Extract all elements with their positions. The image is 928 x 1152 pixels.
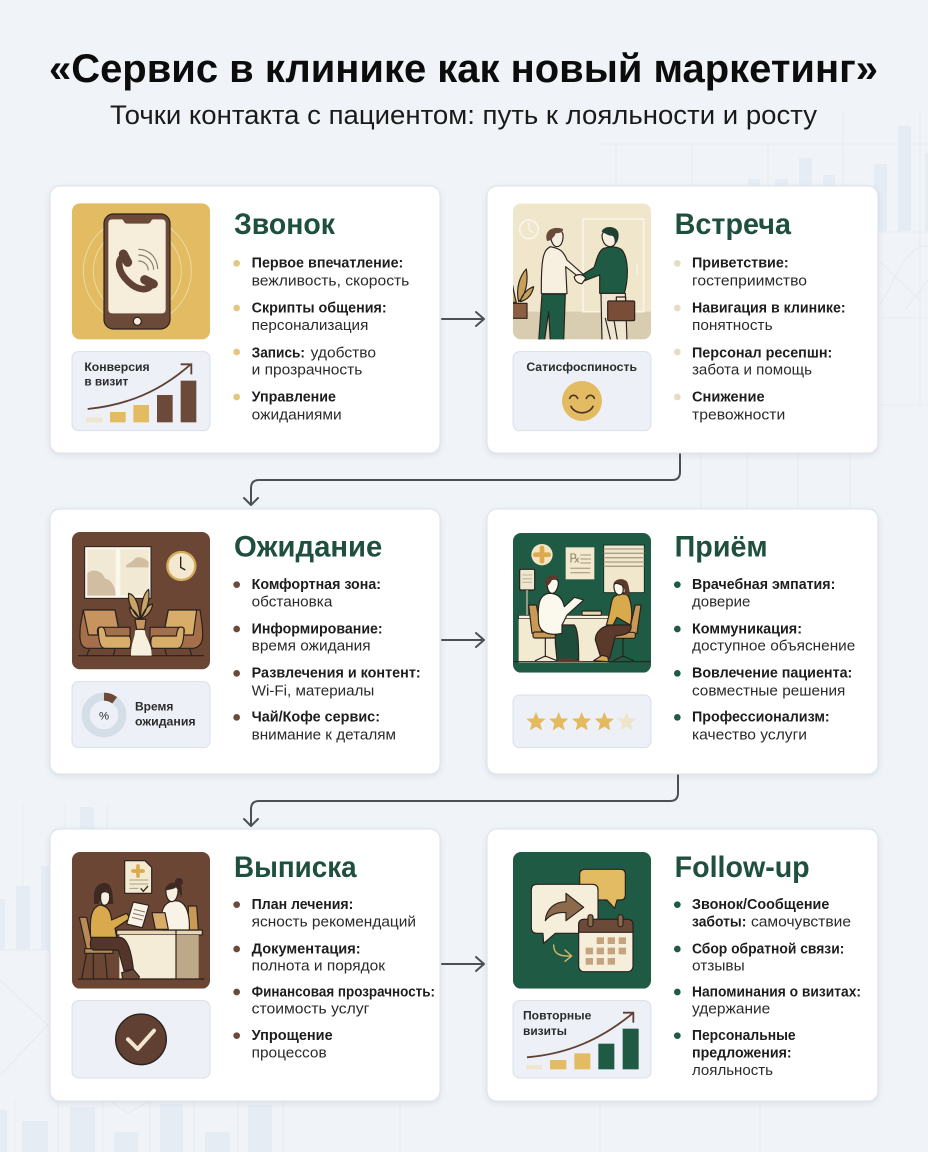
list: ожиданиями: [252, 407, 342, 423]
list: Управление: [252, 390, 336, 406]
list: Коммуникация:: [692, 621, 802, 637]
list: Врачебная эмпатия:: [692, 577, 835, 593]
list: [674, 256, 846, 423]
list: время ожидания: [252, 639, 371, 655]
chart: conversion to visit: в визит: [84, 375, 129, 388]
list: [233, 256, 410, 423]
panel: Follow-up: [487, 829, 878, 1101]
chart: repeat visits: Повторные: [523, 1009, 592, 1022]
chart: repeat visits: [513, 1001, 651, 1078]
list: Профессионализм:: [692, 710, 830, 726]
heading: Выписка: [234, 851, 357, 884]
list: Wi-Fi, материалы: [252, 683, 374, 699]
list: [674, 577, 855, 743]
list: тревожности: [692, 407, 785, 423]
arrow: discharge to follow-up: [442, 957, 484, 971]
illustration: discharge desk: [72, 852, 210, 989]
list: внимание к деталям: [252, 727, 396, 743]
list: Напоминания о визитах:: [692, 984, 861, 1000]
list: вежливость, скорость: [252, 274, 410, 290]
list: Звонок/Сообщение: [692, 897, 829, 913]
panel: Выписка: [50, 829, 440, 1101]
chart: conversion to visit: [72, 352, 210, 431]
list: [233, 577, 421, 743]
subtitle: Точки контакта с пациентом: путь к лояльности и росту: [110, 100, 818, 130]
heading: Приём: [675, 531, 768, 564]
widget: satisfaction smiley: Сатисфоспиность: [526, 361, 637, 374]
list: стоимость услуг: [252, 1002, 369, 1018]
list: отзывы: [692, 959, 745, 975]
widget: satisfaction smiley: [513, 352, 651, 431]
arrow: appointment to discharge: [244, 774, 678, 826]
list: доверие: [692, 594, 750, 610]
title: «Сервис в клинике как новый маркетинг»: [49, 47, 878, 91]
list: Персональные: [692, 1028, 796, 1044]
widget: check mark: [72, 1001, 210, 1078]
panel: Ожидание: [50, 509, 440, 774]
heading: Follow-up: [675, 851, 810, 884]
illustration: handshake: [510, 203, 651, 342]
panel: Звонок: [50, 186, 440, 453]
list: Навигация в клинике:: [692, 300, 846, 316]
heading: Ожидание: [234, 531, 382, 564]
widget: waiting time donut: [72, 682, 210, 748]
heading: Звонок: [234, 208, 335, 241]
widget: star rating: [513, 695, 651, 748]
widget: waiting time donut: %: [99, 710, 109, 722]
list: Запись:: [252, 345, 305, 361]
list: лояльность: [692, 1063, 773, 1079]
list: предложения:: [692, 1046, 792, 1062]
list: и прозрачность: [252, 363, 363, 379]
list: забота и помощь: [692, 363, 812, 379]
panel: Приём: [487, 509, 878, 774]
list: обстановка: [252, 594, 333, 610]
list: ясность рекомендаций: [252, 915, 416, 931]
list: качество услуги: [692, 727, 807, 743]
list: Информирование:: [252, 621, 383, 637]
list: Упрощение: [252, 1028, 333, 1044]
panel: Встреча: [487, 186, 878, 453]
widget: waiting time donut: Время: [135, 700, 173, 713]
icon: smartphone: [72, 203, 210, 339]
list: Комфортная зона:: [252, 577, 381, 593]
list: План лечения:: [252, 897, 353, 913]
arrow: meeting to waiting: [244, 454, 680, 505]
list: Приветствие:: [692, 256, 789, 272]
list: Скрипты общения:: [252, 300, 387, 316]
icon: chat bubbles and calendar: [513, 852, 651, 989]
list: гостеприимство: [692, 274, 807, 290]
widget: waiting time donut: ожидания: [135, 715, 196, 728]
list: процессов: [252, 1046, 327, 1062]
heading: Встреча: [675, 208, 791, 241]
arrow: waiting to appointment: [442, 633, 484, 647]
list: самочувствие: [751, 915, 851, 931]
list: персонализация: [252, 318, 368, 334]
list: понятность: [692, 318, 773, 334]
list: Финансовая прозрачность:: [252, 984, 435, 1000]
arrow: call to meeting: [442, 312, 484, 326]
list: удержание: [692, 1002, 770, 1018]
illustration: doctor and patient: ℞: [569, 552, 581, 566]
list: Первое впечатление:: [252, 256, 403, 272]
list: удобство: [311, 345, 376, 361]
list: совместные решения: [692, 683, 845, 699]
list: [233, 897, 435, 1062]
list: Персонал ресепшн:: [692, 345, 832, 361]
list: [674, 897, 861, 1079]
illustration: waiting room: [72, 532, 210, 669]
list: Развлечения и контент:: [252, 666, 421, 682]
list: Сбор обратной связи:: [692, 941, 844, 957]
list: полнота и порядок: [252, 959, 386, 975]
list: доступное объяснение: [692, 639, 855, 655]
list: Вовлечение пациента:: [692, 666, 852, 682]
list: Чай/Кофе сервис:: [252, 710, 380, 726]
illustration: doctor and patient: [513, 533, 651, 673]
list: Документация:: [252, 941, 361, 957]
list: заботы:: [692, 915, 746, 931]
list: Снижение: [692, 390, 765, 406]
chart: conversion to visit: Конверсия: [84, 361, 150, 374]
chart: repeat visits: визиты: [523, 1025, 567, 1038]
